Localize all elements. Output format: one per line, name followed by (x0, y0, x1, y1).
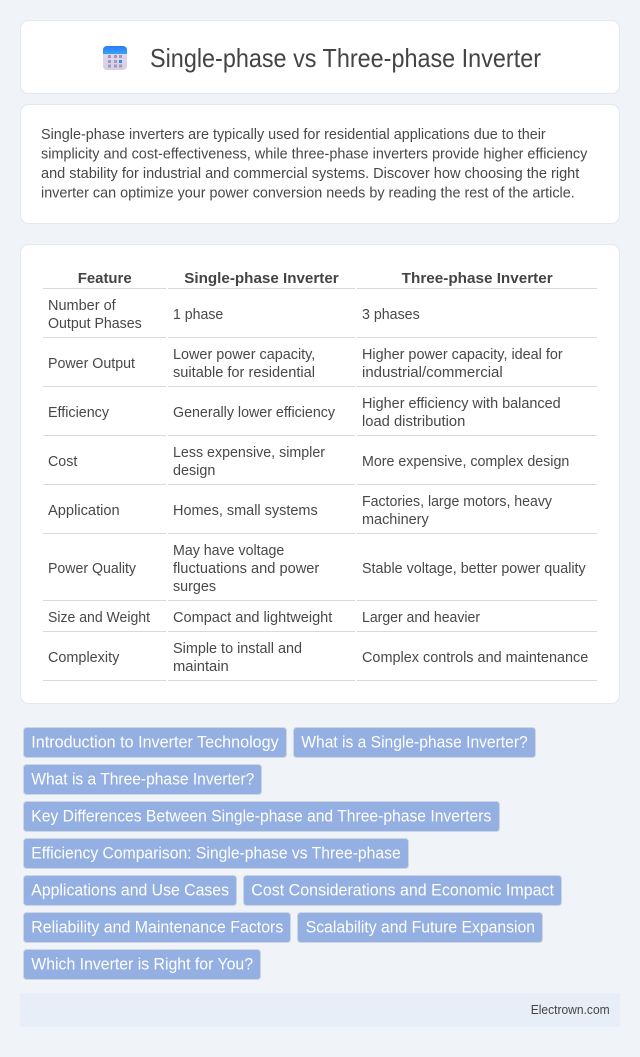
intro text: simplicity and cost-effectiveness, while three-phase inverters provide higher efficiency (41, 146, 588, 162)
row: efficiency: Generally lower efficiency (173, 405, 336, 421)
row: size and weight (43, 610, 597, 632)
tag: cost considerations: Cost Considerations and Economic Impact (251, 882, 554, 900)
row: efficiency (43, 396, 597, 436)
row: complexity (43, 641, 597, 681)
row: power quality: fluctuations and power (173, 561, 319, 577)
row: power quality: May have voltage (173, 543, 284, 559)
tag: cost considerations (244, 876, 562, 906)
tag: what is single-phase: What is a Single-phase Inverter? (301, 734, 528, 752)
tag: key differences: Key Differences Between Single-phase and Three-phase Inverters (31, 808, 491, 826)
intro text (41, 127, 588, 202)
tag: reliability (24, 912, 290, 942)
tag: reliability: Reliability and Maintenance Factors (31, 918, 283, 936)
row: power output: suitable for residential (173, 365, 315, 381)
intro text: and stability for industrial and commercial systems. Discover how choosing the right (41, 166, 579, 182)
row: complexity: maintain (173, 659, 229, 675)
intro text: Single-phase inverters are typically used for residential applications due to their (41, 127, 546, 143)
row: number of output phases: 1 phase (173, 307, 223, 323)
row: complexity: Simple to install and (173, 641, 302, 657)
row: application: machinery (362, 512, 429, 528)
row: size and weight: Compact and lightweight (173, 610, 332, 626)
table header row: Feature (78, 270, 132, 287)
row: power quality: Power Quality (48, 561, 137, 577)
row: power output: industrial/commercial (362, 365, 503, 381)
icon: calendar (103, 46, 127, 70)
row: power output (43, 347, 597, 387)
row: application: Factories, large motors, heavy (362, 494, 553, 510)
tag: introduction: Introduction to Inverter Technology (31, 734, 280, 752)
tag: applications: Applications and Use Cases (31, 882, 229, 900)
row: power output: Higher power capacity, ideal for (362, 347, 563, 363)
row: cost: Less expensive, simpler (173, 445, 325, 461)
row: number of output phases (43, 298, 597, 338)
row: efficiency: load distribution (362, 414, 465, 430)
row: number of output phases: Number of (48, 298, 117, 314)
row: power output: Lower power capacity, (173, 347, 315, 363)
row: power output: Power Output (48, 356, 135, 372)
tag: what is three-phase: What is a Three-phase Inverter? (31, 770, 254, 788)
tag: which inverter (24, 950, 260, 980)
row: size and weight: Larger and heavier (362, 610, 480, 626)
title: Single-phase vs Three-phase Inverter (150, 45, 541, 73)
tag: introduction (24, 728, 286, 758)
tag: what is three-phase (24, 764, 262, 794)
footer (20, 993, 620, 1027)
row: complexity: Complex controls and maintenance (362, 650, 588, 666)
tag: efficiency comparison: Efficiency Comparison: Single-phase vs Three-phase (31, 844, 401, 862)
row: cost: design (173, 463, 215, 479)
panel: header (20, 20, 620, 94)
row: cost (43, 445, 597, 485)
row: application (43, 494, 597, 534)
row: application: Application (48, 503, 120, 519)
table header row: Three-phase Inverter (402, 270, 553, 287)
tag: efficiency comparison (24, 838, 408, 868)
table header row: Single-phase Inverter (184, 270, 339, 287)
tag: applications (24, 876, 236, 906)
tag: scalability: Scalability and Future Expansion (306, 918, 535, 936)
row: size and weight: Size and Weight (48, 610, 150, 626)
panel: comparison table (20, 244, 620, 704)
tag: which inverter: Which Inverter is Right for You? (31, 956, 253, 974)
row: application: Homes, small systems (173, 503, 318, 519)
row: cost: Cost (48, 454, 77, 470)
row: power quality: Stable voltage, better power quality (362, 561, 586, 577)
row: number of output phases: 3 phases (362, 307, 420, 323)
row: complexity: Complexity (48, 650, 120, 666)
intro text: inverter can optimize your power conversion needs by reading the rest of the article. (41, 186, 575, 202)
footer: Electrown.com (531, 1002, 610, 1017)
row: cost: More expensive, complex design (362, 454, 569, 470)
table header row (43, 270, 597, 289)
row: number of output phases: Output Phases (48, 316, 142, 332)
tag: key differences (24, 802, 500, 832)
tag: what is single-phase (294, 728, 536, 758)
row: power quality (43, 543, 597, 601)
row: efficiency: Efficiency (48, 405, 110, 421)
row: power quality: surges (173, 579, 216, 595)
tag: scalability (298, 912, 542, 942)
panel: topic tags (24, 728, 562, 980)
panel: introduction (20, 104, 620, 224)
row: efficiency: Higher efficiency with balanced (362, 396, 561, 412)
